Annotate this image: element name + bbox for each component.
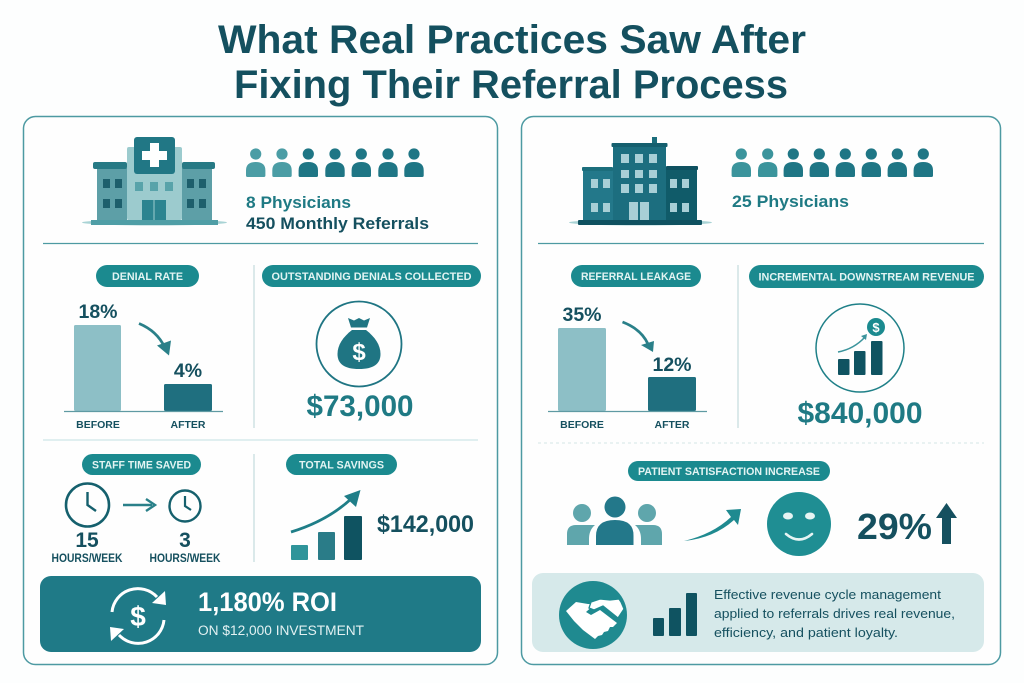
text: takeaway: Effective revenue cycle management: [714, 587, 941, 602]
banner: takeaway: [532, 573, 984, 652]
bar chart: referral leakage: AFTER: [654, 419, 690, 431]
icon: office building: [569, 137, 712, 226]
pill: staff time saved: STAFF TIME SAVED: [92, 460, 191, 472]
text: takeaway: applied to referrals drives real revenue,: [714, 606, 955, 621]
title: Fixing Their Referral Process: [234, 63, 788, 107]
bar chart: referral leakage: BEFORE: [560, 419, 604, 431]
text: physicians count: 25 Physicians: [732, 193, 849, 211]
icon: physician row: [246, 148, 424, 177]
icon: revenue growth: [816, 304, 904, 392]
bar chart: denial rate: 18%: [78, 301, 118, 323]
icon: smiley: [767, 492, 831, 556]
pill: outstanding denials: OUTSTANDING DENIALS COLLECTED: [272, 271, 472, 283]
chart: total savings: [291, 490, 362, 560]
bar chart: referral leakage: 35%: [562, 304, 602, 326]
icon: hospital: [82, 137, 227, 226]
text: monthly referrals: 450 Monthly Referrals: [246, 215, 429, 233]
bar chart: referral leakage: [548, 304, 707, 431]
pill: referral leakage: REFERRAL LEAKAGE: [581, 271, 691, 283]
banner: ROI: [40, 576, 481, 652]
pill: incremental revenue: INCREMENTAL DOWNSTREAM REVENUE: [758, 272, 974, 284]
title: What Real Practices Saw After: [218, 18, 806, 62]
clocks: staff time: 15: [75, 529, 99, 552]
pill: patient satisfaction: PATIENT SATISFACTION INCREASE: [638, 466, 820, 478]
icon: physician row: [732, 148, 933, 177]
bar chart: denial rate: BEFORE: [76, 419, 120, 431]
stat: patient satisfaction: 29%: [857, 506, 932, 547]
bar chart: referral leakage: 12%: [652, 354, 692, 376]
icon: dollar cycle: [110, 589, 166, 643]
text: investment: ON $12,000 INVESTMENT: [198, 623, 364, 638]
icon: handshake: [559, 581, 627, 649]
clocks: staff time: HOURS/WEEK: [52, 553, 123, 565]
panel: left practice: [24, 116, 498, 664]
pill: patient satisfaction: [628, 461, 830, 481]
stat: incremental revenue: $840,000: [798, 397, 922, 430]
bar chart: denial rate: AFTER: [170, 419, 206, 431]
icon: dollar cycle: $: [130, 601, 146, 632]
icon: revenue growth: $: [872, 320, 880, 335]
pill: total savings: TOTAL SAVINGS: [299, 460, 384, 472]
stat: outstanding denials: $73,000: [306, 390, 414, 423]
clocks: staff time: 3: [179, 529, 191, 552]
stat: total savings: $142,000: [377, 511, 474, 538]
icon: patient group: [567, 496, 662, 545]
arrow: rising satisfaction: [684, 509, 741, 541]
clocks: staff time: [52, 484, 221, 565]
bar chart: denial rate: 4%: [174, 360, 202, 382]
text: takeaway: efficiency, and patient loyalty.: [714, 625, 898, 640]
pill: total savings: [286, 454, 397, 475]
pill: outstanding denials: [262, 265, 481, 287]
pill: staff time saved: [82, 454, 201, 475]
icon: mini bars: [653, 593, 697, 636]
clocks: staff time: HOURS/WEEK: [150, 553, 221, 565]
icon: money bag: $: [352, 339, 366, 366]
pill: incremental revenue: [749, 265, 984, 288]
title: [218, 18, 806, 107]
arrow: up: [936, 503, 957, 544]
pill: referral leakage: [571, 265, 701, 287]
pill: denial rate: [96, 265, 199, 287]
stat: ROI: 1,180% ROI: [198, 587, 337, 617]
icon: money bag: [316, 302, 402, 386]
text: physicians count: 8 Physicians: [246, 194, 351, 212]
text: takeaway: [714, 587, 955, 640]
bar chart: denial rate: [64, 301, 223, 431]
pill: denial rate: DENIAL RATE: [112, 271, 183, 283]
panel: right practice: [522, 116, 1000, 664]
